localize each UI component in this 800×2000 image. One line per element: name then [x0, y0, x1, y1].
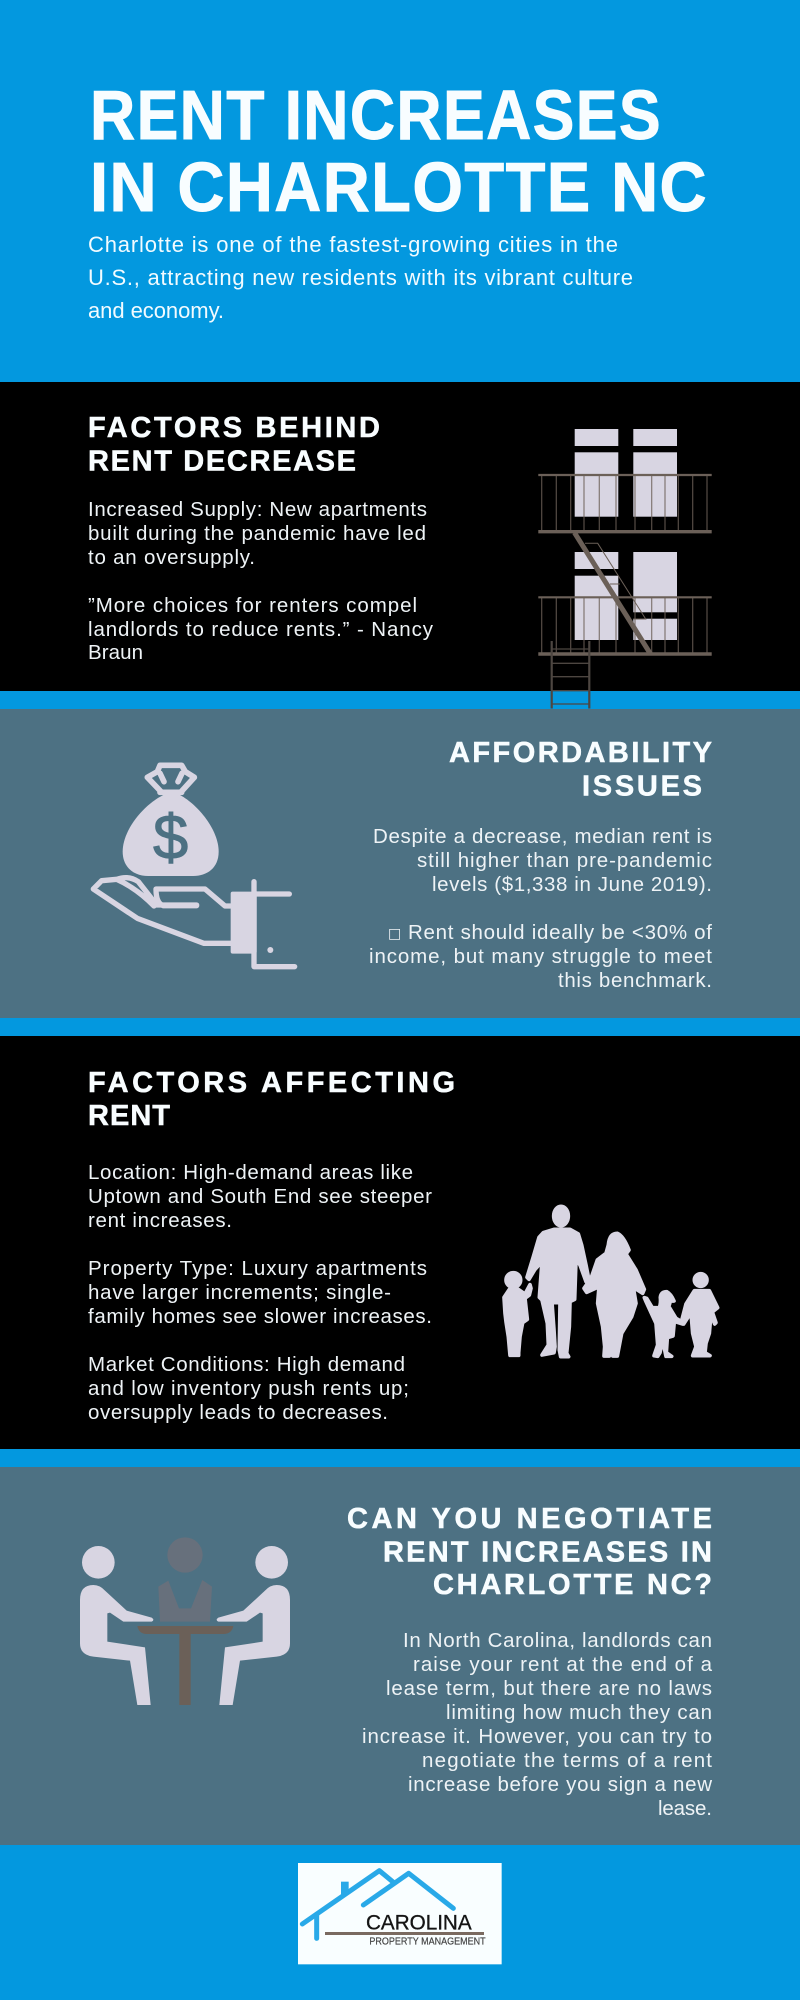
- heading: factors affecting rent: RENT: [88, 1100, 170, 1132]
- text: increased supply: landlords to reduce rents.” - Nancy: [88, 618, 434, 641]
- text: median rent: □: [388, 926, 401, 942]
- text: increased supply: built during the pandemic have led: [88, 522, 426, 545]
- text: market conditions: oversupply leads to decreases.: [88, 1401, 388, 1424]
- intro text: and economy.: [88, 298, 224, 323]
- panel: factors behind rent decrease: [0, 382, 800, 708]
- text: median rent: Despite a decrease, median rent is: [373, 825, 712, 848]
- text: property type: have larger increments; single-: [88, 1281, 391, 1304]
- icon: fire escape building: [538, 429, 712, 708]
- text: north carolina negotiation: [362, 1629, 713, 1820]
- heading: affordability issues: AFFORDABILITY: [449, 737, 712, 769]
- panel: can you negotiate: [0, 1467, 800, 1845]
- intro text: [88, 232, 633, 323]
- heading: can you negotiate rent increases: CAN YOU NEGOTIATE: [347, 1503, 712, 1535]
- text: increased supply: [88, 498, 434, 664]
- text: north carolina negotiation: increase before you sign a new: [408, 1773, 712, 1796]
- heading: affordability issues: [449, 737, 712, 803]
- text: property type: [88, 1257, 432, 1328]
- heading: affordability issues: ISSUES: [582, 771, 702, 803]
- text: location: [88, 1161, 432, 1232]
- text: median rent: levels ($1,338 in June 2019).: [432, 873, 712, 896]
- icon: hand holding money bag: $: [153, 803, 188, 873]
- text: north carolina negotiation: raise your rent at the end of a: [413, 1653, 713, 1676]
- text: median rent: [369, 825, 712, 992]
- text: market conditions: and low inventory push rents up;: [88, 1377, 409, 1400]
- title: RENT INCREASES: [90, 76, 662, 154]
- icon: hand holding money bag: [93, 765, 295, 967]
- intro text: U.S., attracting new residents with its vibrant culture: [88, 265, 633, 290]
- heading: factors affecting rent: [88, 1067, 455, 1132]
- text: median rent: this benchmark.: [558, 969, 712, 992]
- panel: factors affecting rent: [0, 1036, 800, 1449]
- heading: factors behind rent decrease: RENT DECREASE: [88, 446, 356, 478]
- panel: affordability issues: [0, 709, 800, 1018]
- heading: factors behind rent decrease: FACTORS BEHIND: [88, 412, 380, 444]
- heading: factors affecting rent: FACTORS AFFECTING: [88, 1067, 455, 1099]
- heading: factors behind rent decrease: [88, 412, 380, 478]
- logo: carolina property management: CAROLINA: [366, 1910, 472, 1934]
- icon: people at a table: [80, 1537, 290, 1705]
- text: north carolina negotiation: negotiate the terms of a rent: [422, 1749, 712, 1772]
- text: increased supply: Increased Supply: New apartments: [88, 498, 427, 521]
- text: market conditions: Market Conditions: High demand: [88, 1353, 405, 1376]
- text: north carolina negotiation: In North Carolina, landlords can: [403, 1629, 712, 1652]
- text: median rent: Rent should ideally be <30% of: [408, 921, 712, 944]
- heading: can you negotiate rent increases: RENT INCREASES IN: [383, 1537, 712, 1569]
- text: location: Location: High-demand areas like: [88, 1161, 413, 1184]
- text: north carolina negotiation: lease term, but there are no laws: [386, 1677, 712, 1700]
- text: median rent: still higher than pre-pandemic: [417, 849, 712, 872]
- logo: carolina property management: PROPERTY MANAGEMENT: [369, 1936, 486, 1947]
- intro text: Charlotte is one of the fastest-growing cities in the: [88, 232, 618, 257]
- text: median rent: income, but many struggle to meet: [369, 945, 712, 968]
- title: [90, 76, 708, 226]
- text: market conditions: [88, 1353, 409, 1424]
- text: property type: family homes see slower increases.: [88, 1305, 432, 1328]
- text: north carolina negotiation: lease.: [658, 1797, 712, 1820]
- heading: can you negotiate rent increases: [347, 1503, 712, 1601]
- icon: family silhouette: [504, 1206, 718, 1357]
- heading: can you negotiate rent increases: CHARLOTTE NC?: [433, 1569, 712, 1601]
- text: location: rent increases.: [88, 1209, 232, 1232]
- text: increased supply: to an oversupply.: [88, 546, 255, 569]
- text: north carolina negotiation: increase it. However, you can try to: [362, 1725, 712, 1748]
- text: north carolina negotiation: limiting how much they can: [446, 1701, 712, 1724]
- text: location: Uptown and South End see steeper: [88, 1185, 432, 1208]
- text: increased supply: Braun: [88, 641, 143, 664]
- text: increased supply: ”More choices for renters compel: [88, 594, 417, 617]
- logo: carolina property management: [298, 1863, 502, 1964]
- title: IN CHARLOTTE NC: [90, 148, 708, 226]
- panel: header: [0, 0, 800, 382]
- text: property type: Property Type: Luxury apartments: [88, 1257, 427, 1280]
